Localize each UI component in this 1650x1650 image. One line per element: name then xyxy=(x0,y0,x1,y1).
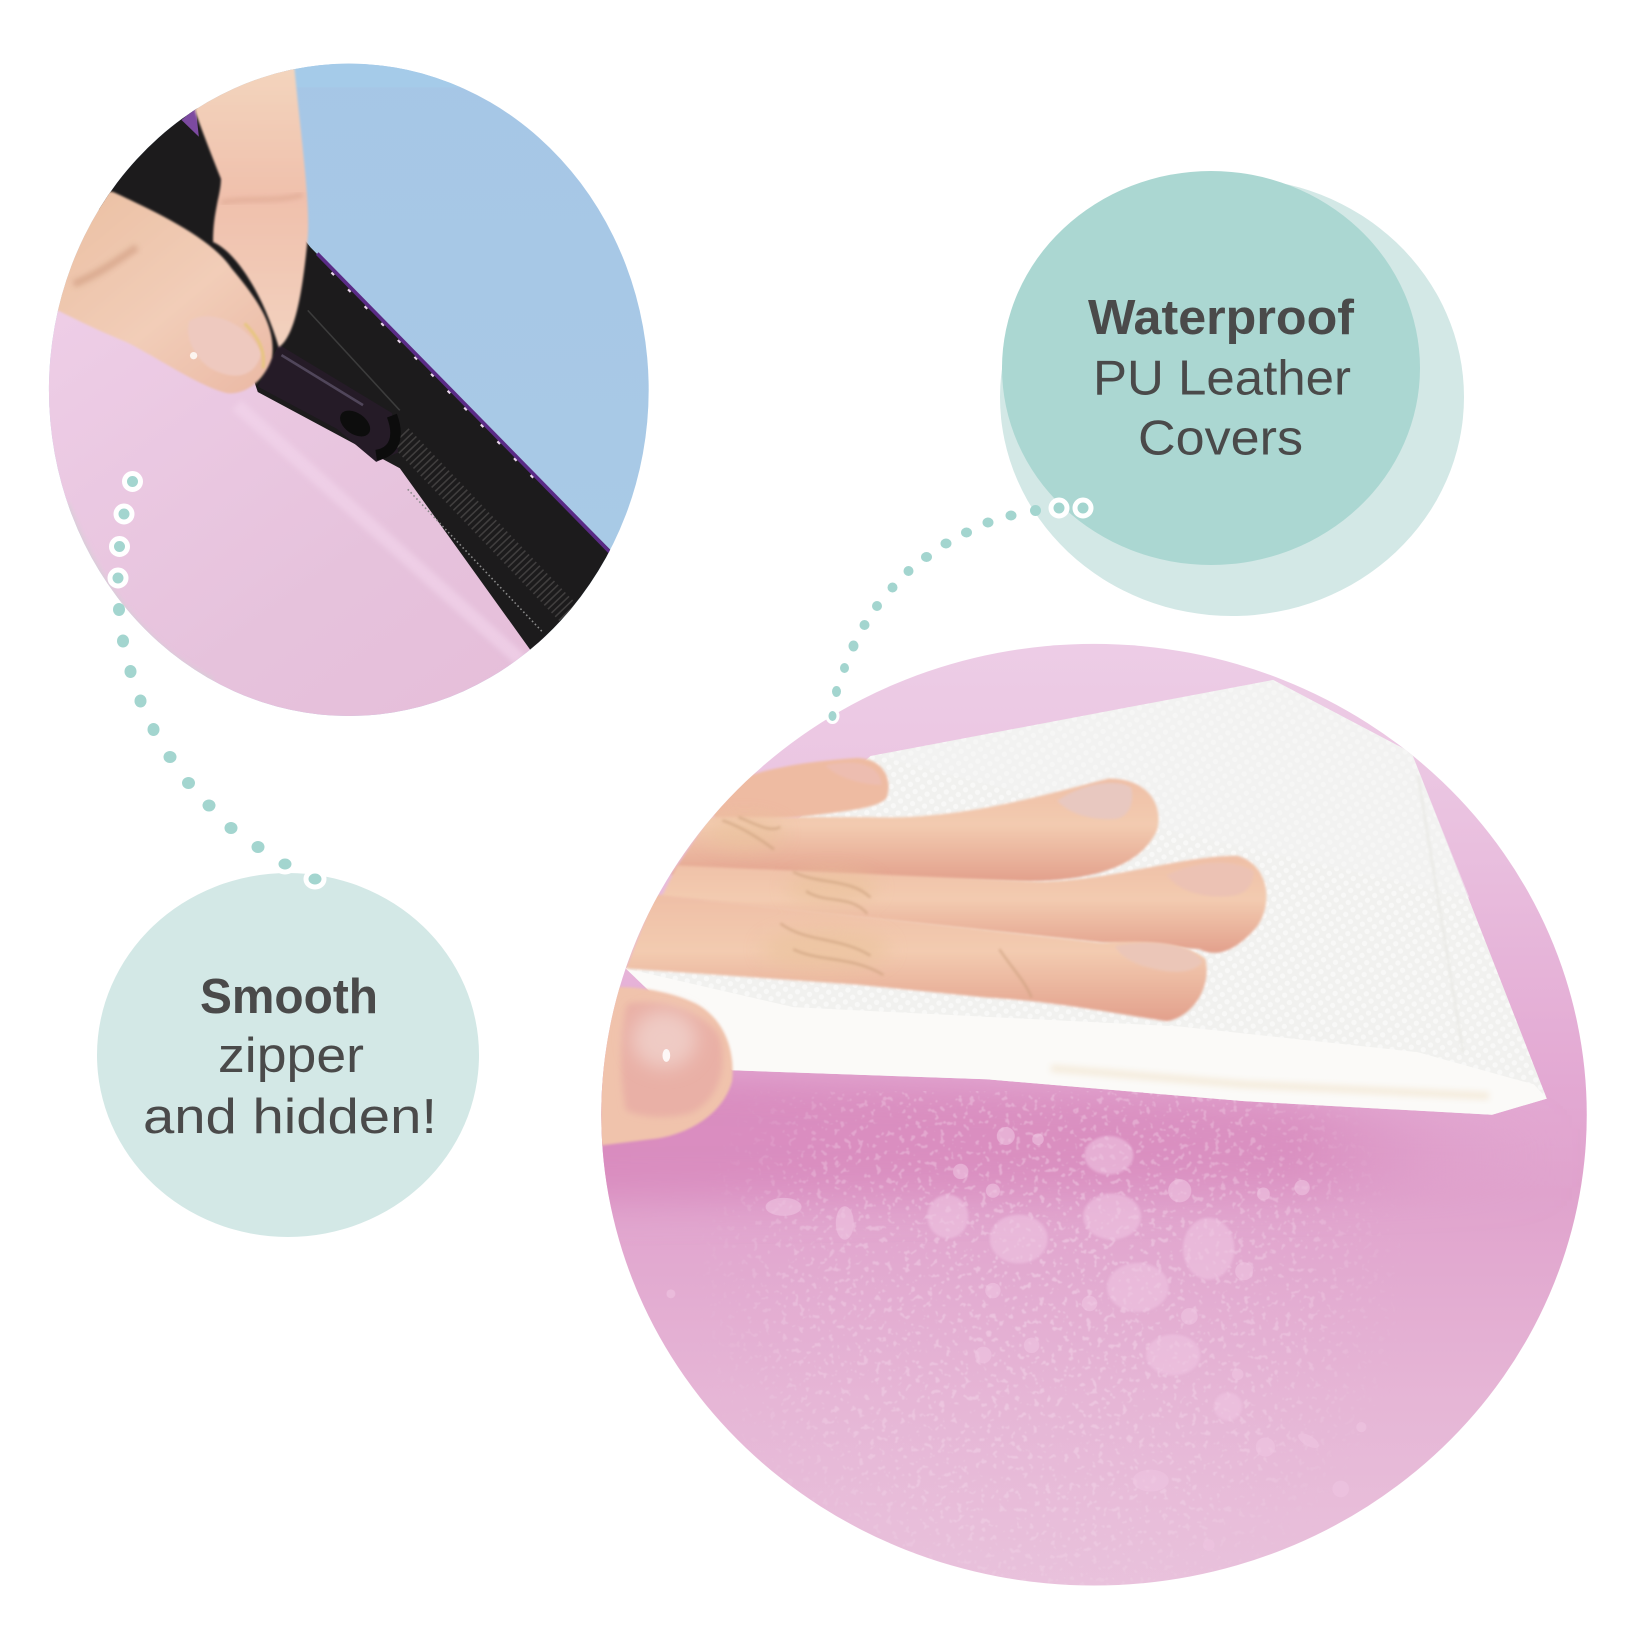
knuckle tan wash xyxy=(706,818,890,970)
water droplets xyxy=(666,1127,1362,1423)
line: and hidden!: and hidden! xyxy=(143,1090,437,1144)
callout: Smooth zipper and hidden xyxy=(97,873,479,1237)
finger 4 nail xyxy=(1115,943,1202,972)
slider xyxy=(376,416,395,455)
tab hole xyxy=(340,410,370,436)
pale edge shadow xyxy=(63,505,210,684)
zipper coil xyxy=(400,437,568,613)
shadow band below paper xyxy=(601,1067,1406,1213)
finger 2 xyxy=(671,778,1159,882)
thumb glint xyxy=(662,1049,670,1062)
zipper tape xyxy=(74,89,616,655)
purple fragment xyxy=(182,108,199,137)
heading: Waterproof xyxy=(1088,291,1355,345)
nail tip xyxy=(245,324,264,368)
finger 3 xyxy=(661,856,1266,953)
photo: paper towel on waterproof cover xyxy=(536,640,1605,1593)
paper towel front fold xyxy=(626,968,1547,1115)
heading: Smooth xyxy=(200,970,378,1024)
upper seam line xyxy=(308,310,400,410)
finger 4 xyxy=(626,894,1207,1021)
upper finger xyxy=(194,69,310,348)
blue cover xyxy=(48,64,649,716)
finger 1 nail xyxy=(825,763,881,785)
piping stitches xyxy=(331,273,542,487)
finger 2 nail xyxy=(1057,783,1132,819)
pale circle xyxy=(97,873,479,1237)
fingernail xyxy=(188,316,261,376)
tab highlight xyxy=(281,355,363,405)
pale back circle xyxy=(1000,178,1464,616)
knuckle crease xyxy=(221,195,303,203)
line: PU Leather: PU Leather xyxy=(1093,352,1351,406)
thumb nail xyxy=(621,1002,723,1117)
zipper seam xyxy=(408,489,542,631)
callout: Waterproof PU Leather Covers xyxy=(1000,171,1464,616)
blue top band xyxy=(284,64,461,88)
line: Covers: Covers xyxy=(1138,412,1303,466)
teal front circle xyxy=(1002,171,1420,565)
knuckle wrinkles xyxy=(722,817,1032,997)
paper towel hazy top xyxy=(1418,768,1470,898)
thumb xyxy=(600,987,733,1146)
fine water speckle xyxy=(747,1091,1354,1558)
finger 3 nail xyxy=(1170,864,1252,880)
finger hair shading xyxy=(74,247,137,284)
pink cover xyxy=(49,302,546,716)
line: zipper: zipper xyxy=(218,1029,364,1083)
nail glint xyxy=(190,352,197,359)
zipper pull tab xyxy=(258,345,398,462)
cream fold edge xyxy=(1051,1068,1489,1096)
dotted connector: Waterproof callout to big photo xyxy=(827,500,1091,722)
lower finger xyxy=(58,190,274,394)
purple piping xyxy=(317,254,610,552)
dotted connector: zipper photo to Smooth callout xyxy=(110,474,324,887)
nail lunula xyxy=(632,1010,697,1068)
paper towel xyxy=(626,680,1547,1115)
inner fold line xyxy=(1418,775,1463,1052)
pink cover xyxy=(600,640,1605,1593)
photo: zipper being pulled xyxy=(48,64,649,716)
finger 1 xyxy=(713,756,890,818)
crease highlight xyxy=(237,405,521,660)
